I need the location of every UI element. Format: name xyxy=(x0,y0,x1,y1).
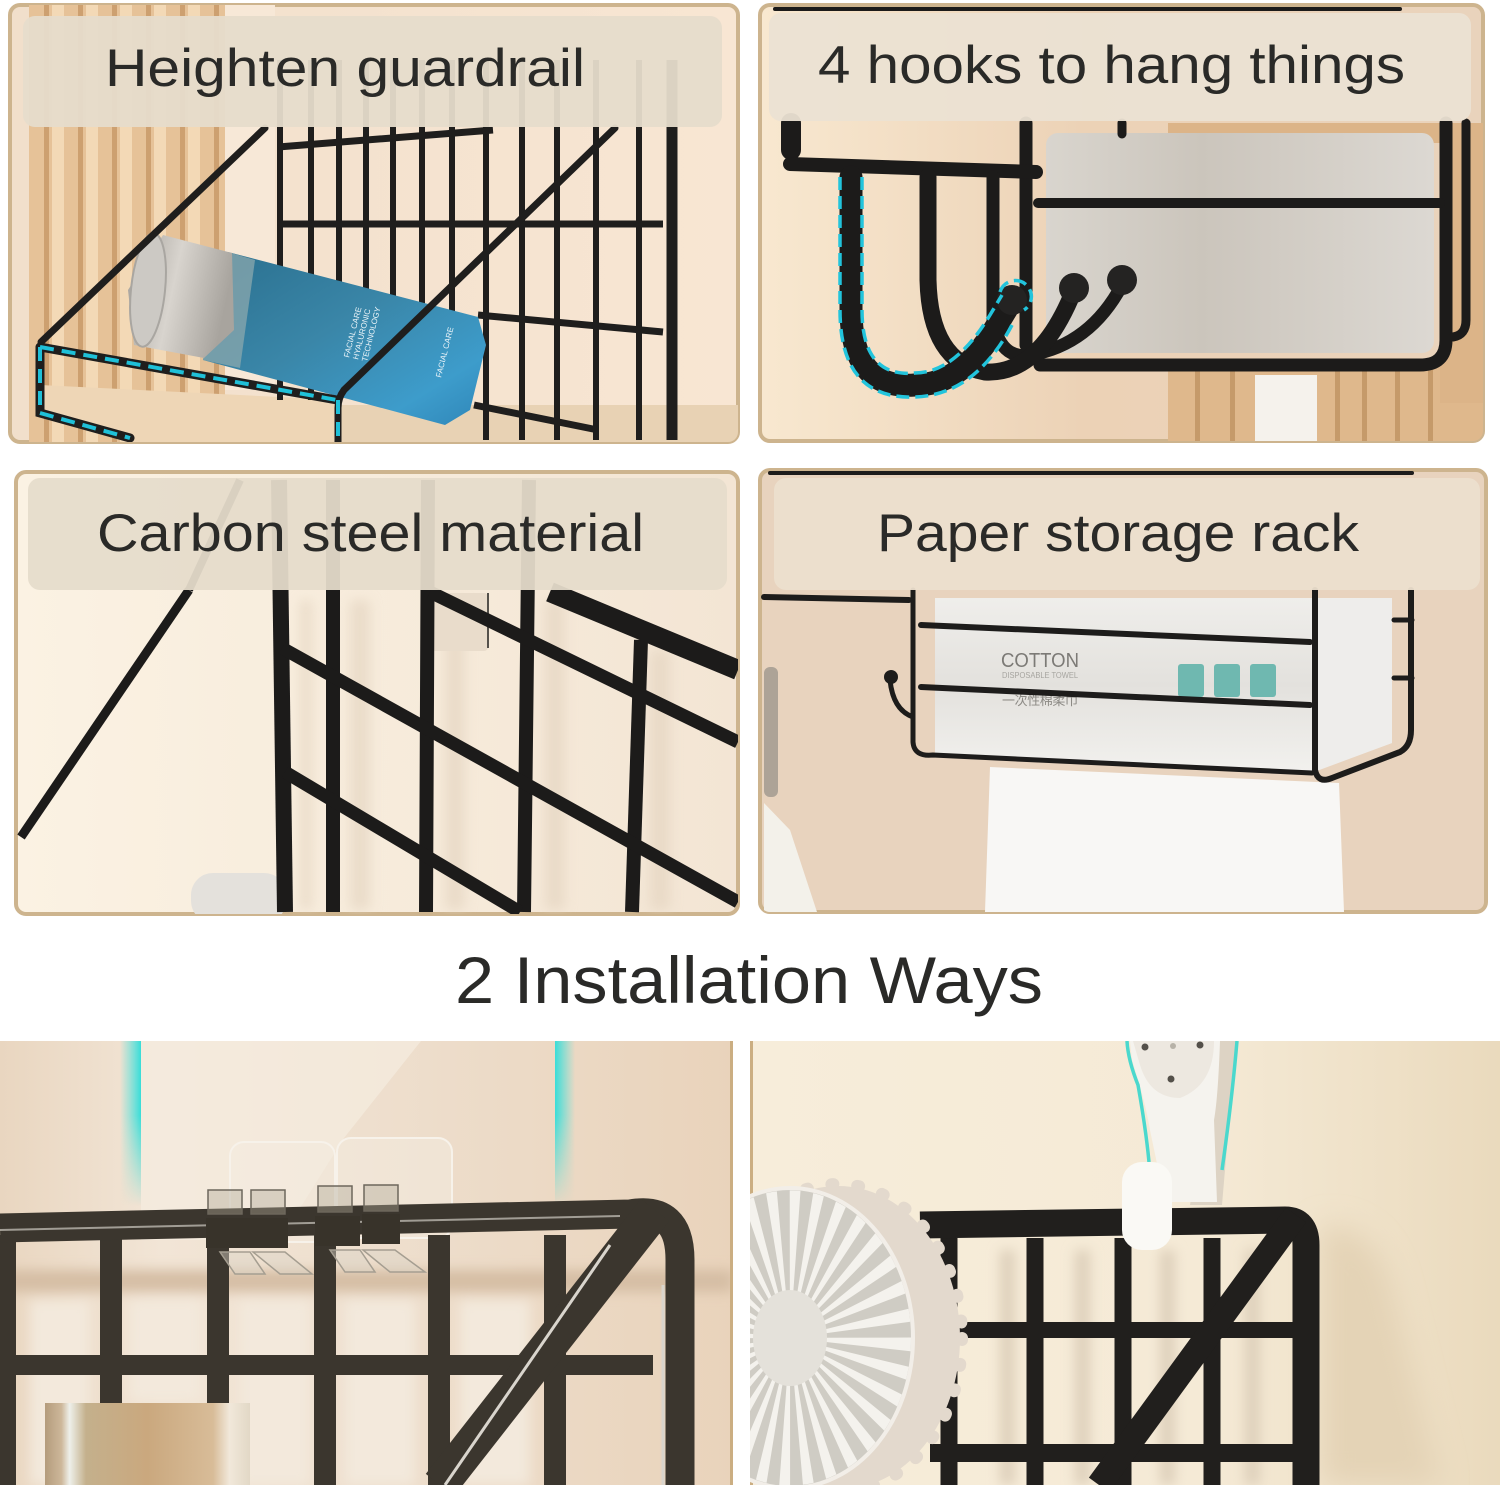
suction pads xyxy=(230,1138,452,1242)
wire mesh xyxy=(21,480,738,912)
wall hook xyxy=(1130,1041,1236,1205)
rail highlights xyxy=(0,1216,663,1485)
glass diagonal highlight xyxy=(141,1041,421,1240)
photo: wall hook installation xyxy=(667,1041,1500,1485)
label: carbon steel xyxy=(28,478,727,590)
paper box xyxy=(1046,133,1434,353)
teal beams xyxy=(120,1041,575,1206)
rack wires xyxy=(775,9,1466,385)
label: 4 hooks xyxy=(769,13,1471,121)
bottle print: FACIAL CARE xyxy=(342,306,363,358)
hook knobs xyxy=(997,265,1137,315)
rack grid xyxy=(920,1215,1306,1485)
heading: 2 Installation Ways xyxy=(455,943,1043,1017)
hooks xyxy=(993,177,1122,356)
box print xyxy=(1001,650,1079,708)
wood slats xyxy=(1168,123,1483,442)
label: heighten guardrail: Heighten guardrail xyxy=(105,39,585,98)
icon: fan xyxy=(667,1184,962,1485)
paper towel xyxy=(985,767,1344,912)
panel: carbon steel xyxy=(16,472,738,923)
bottle print: HYALURONIC xyxy=(351,308,373,360)
label: carbon steel: Carbon steel material xyxy=(97,504,644,563)
blurred background xyxy=(0,1270,733,1485)
teal dashes xyxy=(840,177,1031,397)
hook holder xyxy=(1122,1162,1172,1250)
can xyxy=(191,873,283,914)
can xyxy=(45,1403,250,1485)
box print: COTTON xyxy=(1001,650,1079,672)
teal badges xyxy=(1178,664,1276,697)
hook knob xyxy=(884,670,898,684)
rack grid xyxy=(0,1210,680,1485)
label: paper storage: Paper storage rack xyxy=(877,504,1360,563)
icon: bottle xyxy=(125,232,486,425)
panel edge xyxy=(730,1041,733,1485)
label: paper storage xyxy=(774,478,1480,590)
label: 4 hooks: 4 hooks to hang things xyxy=(818,36,1405,95)
box print: DISPOSABLE TOWEL xyxy=(1002,671,1079,680)
wood slat wall xyxy=(29,5,738,442)
bottle print xyxy=(342,305,455,378)
wire grid xyxy=(278,60,672,440)
rack shadow xyxy=(1322,1225,1440,1485)
label: heighten guardrail xyxy=(23,16,722,127)
photo: suction hook installation xyxy=(0,1041,733,1485)
teal outline xyxy=(1127,1041,1237,1170)
clips xyxy=(206,1185,425,1274)
panel: 4 hooks xyxy=(760,5,1483,442)
teal dashes xyxy=(40,347,338,442)
side objects xyxy=(764,667,817,912)
rack wires xyxy=(764,473,1412,780)
grid shadow xyxy=(1000,1250,1260,1485)
panel: heighten guardrail xyxy=(10,5,738,442)
wall shading xyxy=(300,600,670,910)
bottle print: FACIAL CARE xyxy=(434,326,455,378)
mounting tab xyxy=(430,593,488,651)
paper box xyxy=(935,598,1392,772)
box print: 一次性棉柔巾 xyxy=(1002,693,1078,708)
panel: paper storage xyxy=(760,470,1486,912)
guardrail frame xyxy=(40,128,615,442)
panel edge xyxy=(750,1041,753,1485)
bottle print: TECHNOLOGY xyxy=(360,305,383,362)
